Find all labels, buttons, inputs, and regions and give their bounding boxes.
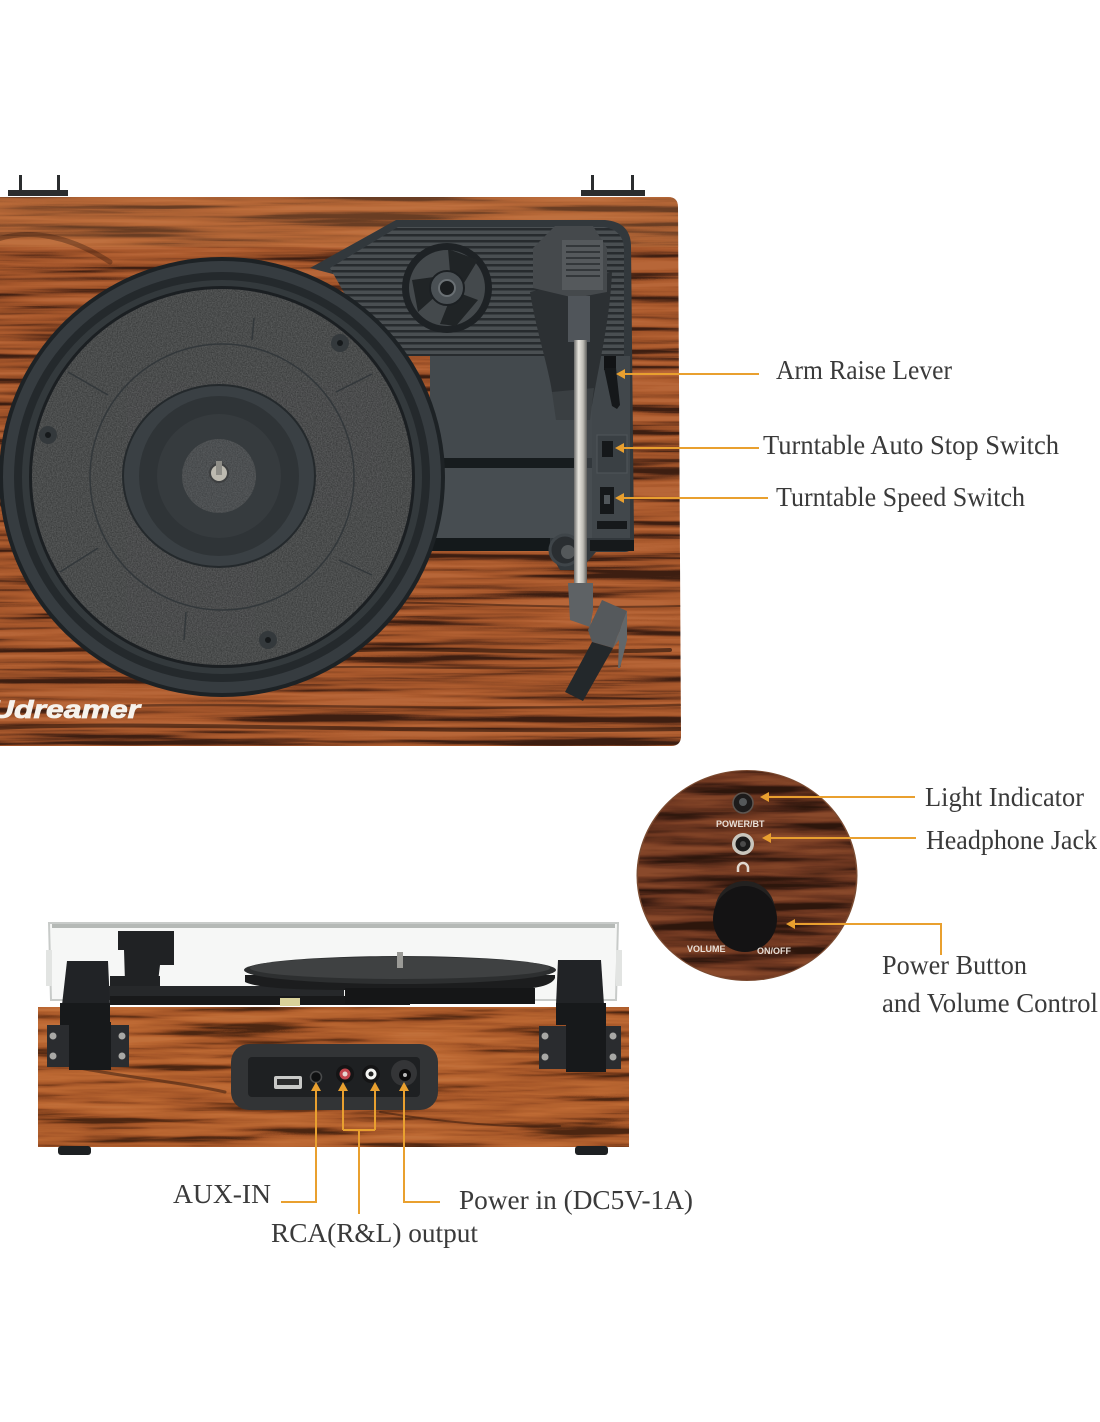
right hinge	[539, 960, 621, 1072]
volume knob	[713, 881, 777, 952]
platter side view	[244, 952, 556, 1004]
arm raise lever label: Arm Raise Lever	[776, 355, 952, 385]
wood top panel	[0, 197, 685, 747]
side control detail circle	[630, 765, 865, 985]
light indicator label: Light Indicator	[925, 782, 1084, 812]
power label: POWER/BT	[716, 819, 765, 829]
arm raise lever label	[616, 355, 952, 385]
mat screws	[331, 334, 349, 352]
rear view turntable	[38, 923, 629, 1155]
arm raise lever	[604, 356, 620, 409]
speed switch	[600, 487, 614, 514]
aux in label	[173, 1082, 321, 1209]
tonearm	[530, 226, 627, 701]
rca output label	[271, 1082, 478, 1248]
platter reel	[402, 243, 492, 333]
rear port panel	[231, 1044, 438, 1110]
auto stop switch label: Turntable Auto Stop Switch	[763, 430, 1059, 460]
left hinge	[47, 961, 129, 1070]
headphone jack label: Headphone Jack	[926, 825, 1097, 855]
tonearm side view	[108, 931, 410, 1006]
on off label: ON/OFF	[757, 946, 791, 956]
aux port	[310, 1072, 322, 1082]
top view turntable	[0, 175, 685, 747]
power port	[391, 1060, 417, 1086]
usb port	[274, 1076, 302, 1089]
red rca port	[336, 1065, 354, 1083]
center label	[123, 385, 315, 567]
white rca port	[362, 1065, 380, 1083]
rear view callouts	[173, 1082, 693, 1248]
speed switch label	[615, 482, 1025, 512]
power and volume label	[786, 919, 1098, 1018]
platter	[0, 257, 445, 697]
transparent lid	[46, 923, 622, 1000]
speed switch label: Turntable Speed Switch	[776, 482, 1025, 512]
rca output label: RCA(R&L) output	[271, 1218, 478, 1248]
wood base	[38, 1007, 629, 1147]
spindle	[210, 464, 228, 482]
headphone icon	[738, 863, 748, 872]
power in label	[399, 1082, 693, 1215]
volume label: VOLUME	[687, 944, 726, 954]
detail circle callouts	[760, 782, 1098, 1018]
light indicator label	[760, 782, 1084, 812]
felt mat	[30, 287, 414, 667]
light indicator LED	[733, 793, 753, 813]
aux in label: AUX-IN	[173, 1179, 271, 1209]
auto stop switch label	[615, 430, 1059, 460]
power and volume label: and Volume Control	[882, 988, 1098, 1018]
lid hinge clips	[8, 175, 645, 196]
tonearm plate	[310, 220, 634, 701]
top view callouts	[615, 355, 1059, 512]
power in label: Power in (DC5V-1A)	[459, 1185, 693, 1215]
headphone jack label	[762, 825, 1097, 855]
headphone jack	[732, 833, 754, 855]
feet	[58, 1146, 608, 1155]
auto stop switch	[597, 435, 627, 473]
power and volume label: Power Button	[882, 950, 1027, 980]
